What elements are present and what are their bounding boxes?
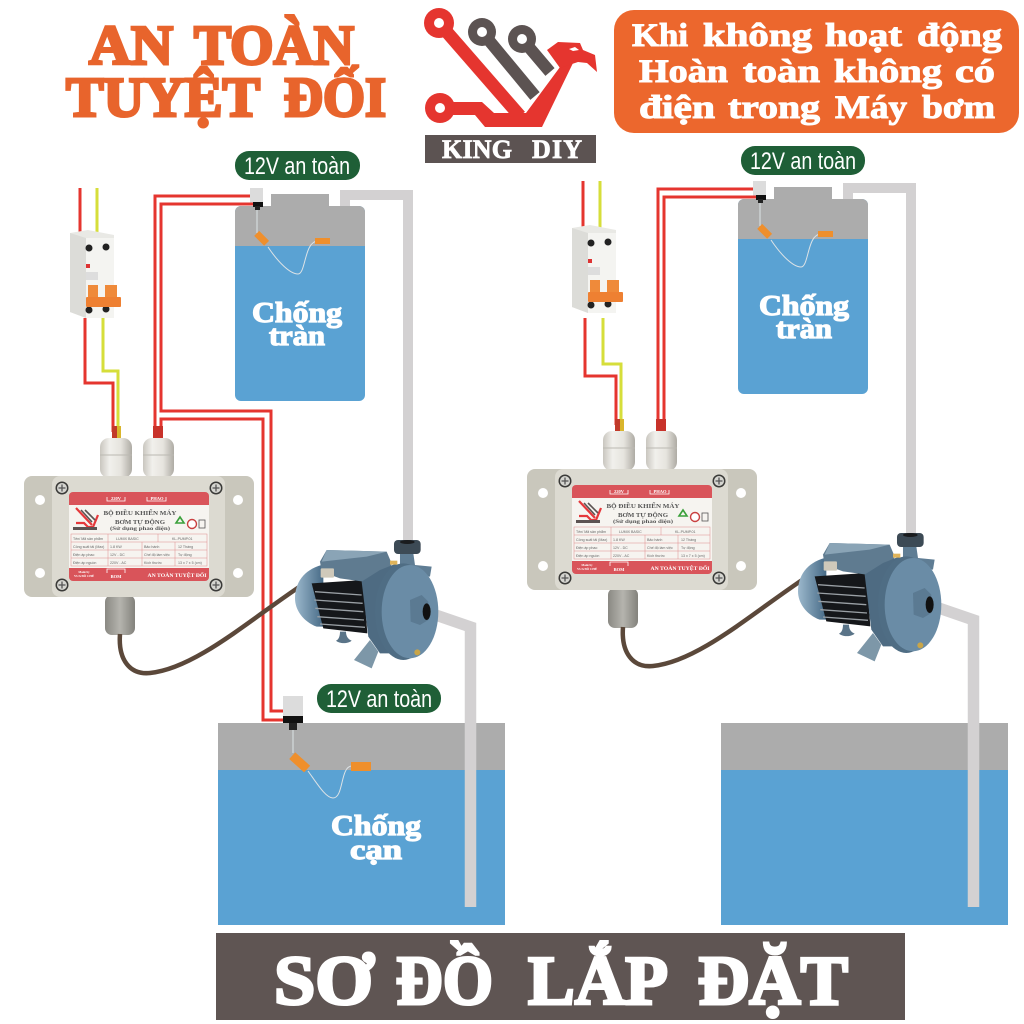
wiring: mains — [80, 188, 118, 432]
callout: orange notice: bơm — [922, 90, 995, 126]
control box label text: KL-PUMP.01 — [172, 537, 193, 541]
callout: orange notice: Máy — [835, 90, 908, 126]
right control box label text: Công suất tải (Max) — [576, 538, 607, 542]
control box label text: VUA ĐỒ CHẾ — [74, 573, 94, 578]
control box label text: 220V — [111, 496, 122, 501]
banner: SƠ ĐỒ LẮP ĐẶT: SƠ — [274, 943, 375, 1020]
water pump — [295, 540, 438, 668]
right top tank: Chống tràn: Chống — [759, 291, 849, 322]
right control box label text: Tên/ Mã sản phẩm — [576, 530, 606, 534]
control box label text: 220V - AC — [110, 561, 127, 565]
right control box label text: Made by — [581, 563, 593, 567]
callout: orange notice: hoạt — [825, 18, 902, 54]
banner: SƠ ĐỒ LẮP ĐẶT: ĐẶT — [698, 943, 848, 1020]
logo: King DIY: DIY — [532, 135, 582, 164]
control box label text: AN TOÀN TUYỆT ĐỐI — [148, 571, 206, 579]
right control box label text: BOM — [614, 567, 625, 572]
right bottom tank — [721, 723, 1008, 925]
logo: King DIY — [424, 8, 597, 164]
callout: orange notice: Khi — [632, 18, 688, 54]
right control box label text: Bảo hành — [647, 538, 662, 542]
title: AN TOÀN TUYỆT ĐỐI: TUYỆT — [66, 66, 260, 129]
panel: right diagram — [527, 146, 1008, 925]
top tank: Chống tràn: Chống — [252, 298, 342, 329]
control box label text: BƠM TỰ ĐỘNG — [115, 518, 165, 526]
callout: orange notice: điện — [639, 90, 715, 126]
right control box label text: AN TOÀN TUYỆT ĐỐI — [650, 564, 710, 572]
right top tank: Chống tràn: tràn — [776, 314, 832, 345]
control box label text: Điện áp nguồn — [73, 561, 96, 565]
title: AN TOÀN TUYỆT ĐỐI: ĐỐI — [284, 65, 386, 129]
right circuit breaker — [572, 225, 623, 313]
control box label text: Công suất tải (Max) — [73, 545, 104, 549]
control box label text: BỘ ĐIỀU KHIỂN MÁY — [104, 509, 177, 517]
control box label text: LUMIX BASIC — [116, 537, 139, 541]
right control box label text: 220V — [614, 489, 625, 494]
control box label text: PHAO — [150, 496, 164, 501]
circuit breaker — [70, 230, 121, 318]
title: AN TOÀN TUYỆT ĐỐI — [66, 15, 386, 129]
right control box label text: BỘ ĐIỀU KHIỂN MÁY — [606, 502, 680, 510]
control box label text: Kích thước — [144, 561, 162, 565]
callout: orange notice: Hoàn — [639, 54, 728, 90]
right control box label text: (Sử dụng phao điện) — [613, 520, 673, 525]
callout: orange notice: không — [834, 54, 943, 90]
panel: left diagram — [24, 151, 505, 925]
wiring: float switches — [155, 196, 283, 720]
callout: orange notice: có — [955, 54, 995, 90]
right control box label text: VUA ĐỒ CHẾ — [577, 566, 597, 571]
right control box label text: 12V - DC — [613, 546, 628, 550]
control box label text: (Sử dụng phao điện) — [110, 527, 170, 532]
bottom tank: Chống cạn — [218, 696, 505, 925]
pipes — [345, 195, 470, 907]
callout: orange notice: toàn — [743, 54, 820, 90]
control box label text: Bảo hành — [144, 545, 159, 549]
title: AN TOÀN TUYỆT ĐỐI: AN — [89, 15, 173, 77]
banner: SƠ ĐỒ LẮP ĐẶT: ĐỒ — [396, 941, 493, 1020]
right control box label text: Kích thước — [647, 554, 665, 558]
top tank: Chống tràn: tràn — [269, 321, 325, 352]
callout: orange notice: không — [703, 18, 813, 54]
top tank: Chống tràn — [235, 188, 365, 401]
label: 12V an toàn bottom: 12V an toàn — [326, 686, 432, 713]
right wiring: mains — [583, 181, 621, 425]
control box label text: Made by — [78, 570, 90, 574]
right control box label text: Chế độ làm việc — [647, 546, 673, 550]
right control box label text: Tự động — [681, 546, 695, 550]
right control box label text: KL-PUMP.01 — [675, 530, 696, 534]
label: 12V an toàn top: 12V an toàn — [244, 153, 350, 180]
right control box label text: Điện áp phao — [576, 546, 597, 550]
label: 12V an toàn right: 12V an toàn — [750, 148, 856, 175]
control box label text: Chế độ làm việc — [144, 553, 170, 557]
right control box label text: BƠM TỰ ĐỘNG — [618, 511, 668, 519]
callout: orange notice: động — [917, 18, 1003, 54]
pump cable — [120, 572, 322, 673]
right control box label text: 13 x 7 x 5 (cm) — [681, 554, 705, 558]
banner: SƠ ĐỒ LẮP ĐẶT — [216, 933, 905, 1020]
title: AN TOÀN TUYỆT ĐỐI: TOÀN — [194, 15, 354, 77]
control box label text: Tự động — [178, 553, 192, 557]
control box label text: 1.8 KW — [110, 545, 122, 549]
right pump cable — [623, 565, 825, 666]
right control box label text: 1.8 KW — [613, 538, 625, 542]
control box — [24, 426, 254, 635]
bottom tank: Chống cạn: Chống — [331, 811, 421, 842]
right wiring: float switch — [658, 189, 756, 425]
right control box label text: 12 Tháng — [681, 538, 696, 542]
right control box label text: Điện áp nguồn — [576, 554, 599, 558]
callout: orange notice — [614, 10, 1019, 133]
callout: orange notice: trong — [728, 90, 821, 126]
right control box label text: LUMIX BASIC — [619, 530, 642, 534]
right water pump — [798, 533, 941, 661]
control box label text — [73, 496, 206, 579]
logo: King DIY: KING — [442, 135, 512, 164]
right pipes — [848, 188, 974, 907]
control box label text: 12 Tháng — [178, 545, 193, 549]
right control box label text — [576, 489, 710, 572]
control box label text: 13 x 7 x 5 (cm) — [178, 561, 202, 565]
control box label text: Tên/ Mã sản phẩm — [73, 537, 103, 541]
control box label text: 12V - DC — [110, 553, 125, 557]
right control box label text: 220V - AC — [613, 554, 630, 558]
bottom tank: Chống cạn: cạn — [350, 835, 403, 866]
right control box label text: PHAO — [654, 489, 667, 494]
control box label text: Điện áp phao — [73, 553, 94, 557]
right control box — [527, 419, 757, 628]
banner: SƠ ĐỒ LẮP ĐẶT: LẮP — [528, 941, 668, 1020]
right top tank: Chống tràn — [738, 181, 868, 394]
control box label text: BOM — [111, 574, 122, 579]
